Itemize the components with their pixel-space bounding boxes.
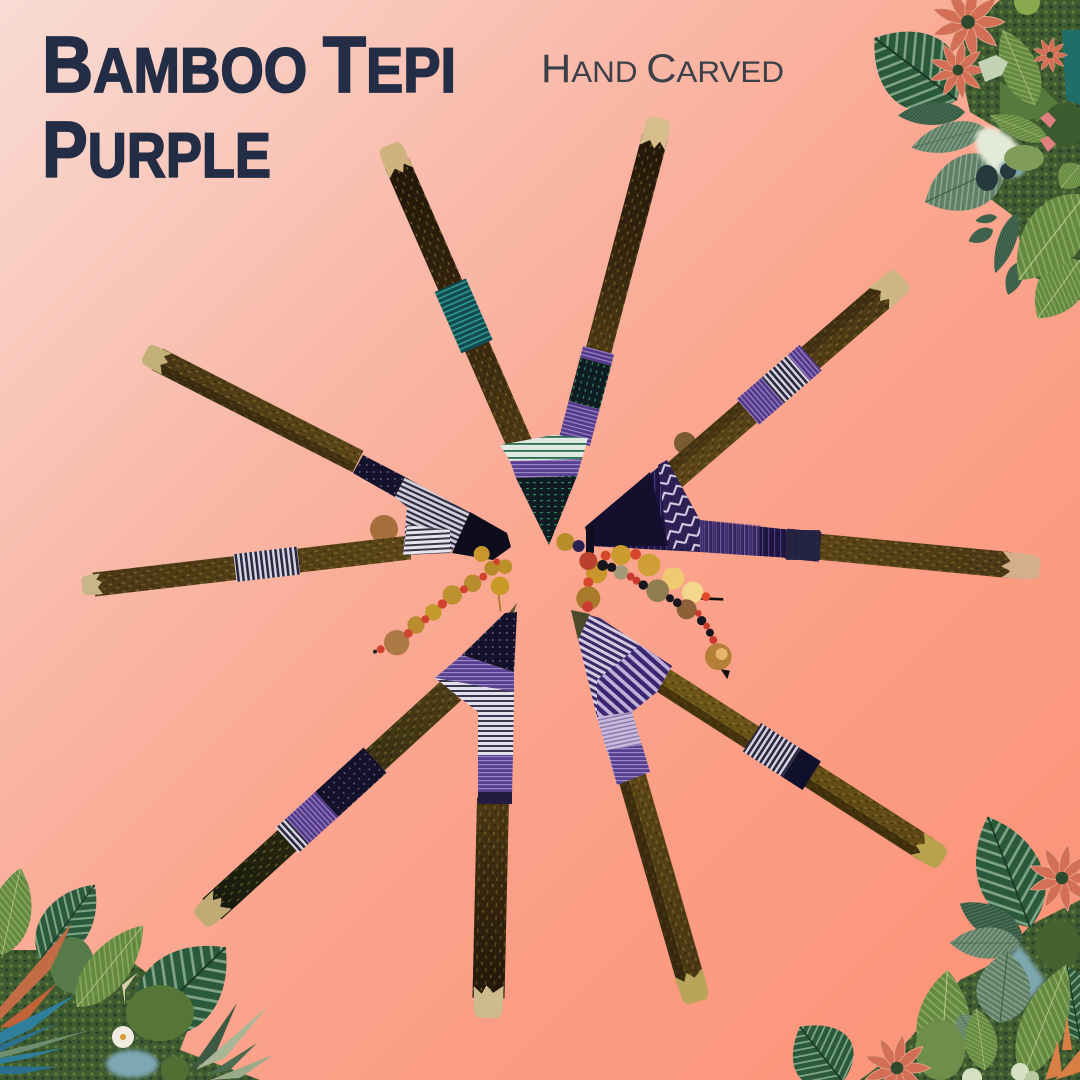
foliage: top right [852,0,1080,331]
stick 2: purple and green wrap, top right [559,114,675,446]
title: BAMBOO TEPI [42,20,456,109]
stick 10: left with white wrap [80,534,411,600]
stick 6: bottom right [618,772,711,1006]
beads: left strand [373,546,512,655]
stick 1: teal wrap, top left [373,138,537,454]
foliage: bottom left [0,864,273,1080]
stick 5: lower right [643,659,952,874]
lower centre wrapped arrowhead [435,603,517,804]
stick 8: lower left [189,678,463,933]
lower right wrapped arrowhead [571,610,672,785]
subtitle: hand carved: HAND CARVED [541,47,784,91]
stick 4: dark purple wrap, right [785,529,1041,583]
stick 3: purple and white wrap, upper right [661,265,914,490]
bead on stick 3 [674,432,696,454]
beads: right strands [556,533,732,679]
left wrapped arrowhead [353,455,511,560]
bead on stick 10 [370,515,398,543]
right wrapped arrowhead [585,460,820,560]
central wrapped point [500,435,588,545]
stick 7: bottom centre [472,798,509,1018]
stick 9: upper left [140,342,363,472]
title [42,20,456,194]
foliage: bottom right [775,805,1080,1080]
title: PURPLE [42,105,271,194]
